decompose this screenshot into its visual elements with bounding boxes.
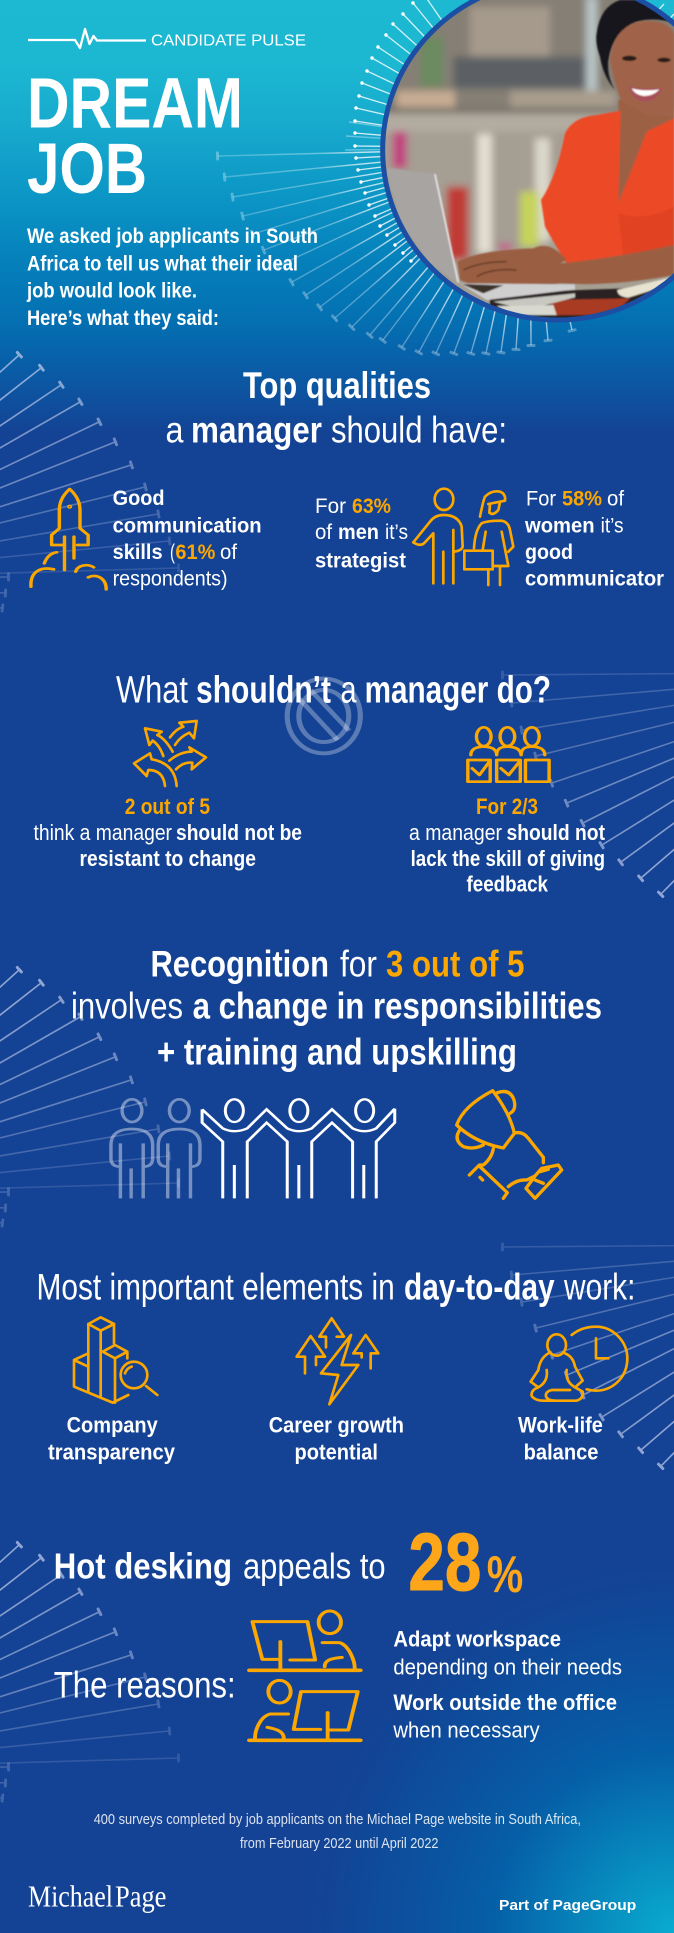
heading: top qualities: a [166,410,184,451]
heading: recognition: involves [71,985,183,1026]
text: adapt workspace and work outside: Work outside the office [393,1690,617,1715]
text: good communication: respondents) [113,567,228,591]
text: career growth [269,1413,404,1464]
text: work-life balance: balance [524,1439,598,1464]
heading: day-to-day work: Most important elements in [36,1266,395,1307]
footnote: 400 surveys completed by job applicants on the Michael Page website in South Africa, [94,1811,581,1828]
intro text: Here’s what they said: [27,307,219,330]
stat: 28%: 28 [408,1517,481,1608]
heading: day-to-day work: work: [563,1266,635,1307]
text: women good communicator: it’s [601,513,624,537]
heading: hot desking: Hot desking [54,1545,232,1586]
heading: what shouldn't a manager do: a [340,669,357,711]
heading: day-to-day work: day-to-day [404,1266,555,1307]
text: women good communicator: women [524,513,595,537]
text: adapt workspace and work outside [392,1627,622,1743]
text: adapt workspace and work outside: when necessary [392,1718,540,1743]
text: resistant to change: resistant to change [80,846,256,871]
title [27,63,243,209]
logo: Michael Page: Michael [28,1879,113,1914]
heading: recognition: a change in responsibilities [193,985,602,1026]
text: men strategist: strategist [315,549,406,573]
text: adapt workspace and work outside: depending on their needs [393,1654,622,1679]
text: women good communicator: good [525,540,573,564]
text: resistant to change: should not be [176,820,302,845]
footnote [94,1811,581,1852]
text: resistant to change: 2 out of 5 [125,794,210,819]
heading: recognition: Recognition [150,944,329,985]
text: resistant to change: think a manager [34,820,172,845]
text: men strategist [315,494,408,573]
heading: top qualities: should have: [331,410,507,451]
text: women good communicator: communicator [525,567,665,591]
icon: rocket [31,489,106,589]
icon: three people with raised arms [202,1099,395,1198]
icon: meditation and clock [531,1327,627,1401]
intro text: We asked job applicants in South [27,225,318,248]
text: women good communicator: 58% [562,487,602,511]
text: work-life balance [518,1413,603,1464]
text: men strategist: For [315,494,346,518]
label: part of PageGroup: Part of PageGroup [499,1897,636,1914]
text: adapt workspace and work outside: Adapt workspace [393,1627,561,1652]
icon: trophy [457,1091,562,1198]
sunburst around photo [218,0,674,353]
text: feedback: lack the skill of giving [411,846,605,871]
icon: prohibited sign [287,679,360,753]
icon: diverging arrows [134,721,206,786]
title: JOB [27,129,147,209]
text: career growth: Career growth [269,1413,404,1438]
text: men strategist: of [315,520,332,544]
icon: two people at desks [249,1611,360,1740]
title: DREAM [27,63,243,143]
heading: recognition: 3 out of 5 [386,944,524,985]
text: company transparency [48,1413,176,1464]
text: good communication: of [220,540,237,564]
text: men strategist: 63% [352,494,391,518]
text: good communication: skills [113,540,163,564]
text: feedback: a manager [409,820,502,845]
text: good communication: communication [113,513,262,537]
text: men strategist: men [338,520,379,544]
heading: what shouldn't a manager do: shouldn’t [196,669,331,711]
text: women good communicator [524,487,665,591]
intro text [26,225,318,330]
heading: top qualities [166,365,507,451]
photo: woman at laptop [367,0,674,340]
heading: top qualities: manager [191,410,322,451]
heading: recognition: + training and upskilling [157,1031,517,1072]
intro text: job would look like. [26,280,197,303]
icon: people with checkboxes [468,727,549,782]
heading: recognition [71,944,602,1072]
text: company transparency: Company [67,1413,158,1438]
footnote: from February 2022 until April 2022 [240,1835,438,1852]
text: work-life balance: Work-life [518,1413,603,1438]
text: good communication: ( [170,540,176,564]
label: candidate pulse: CANDIDATE PULSE [151,33,306,50]
text: career growth: potential [294,1439,378,1464]
heading: hot desking [54,1545,386,1586]
text: good communication [113,486,262,591]
text: feedback: feedback [466,872,548,897]
text: company transparency: transparency [48,1439,176,1464]
heading: what shouldn't a manager do: manager do? [365,669,551,711]
icon: pulse line [28,29,146,48]
icon: man and woman [413,489,513,585]
text: feedback: For 2/3 [476,794,538,819]
heading: top qualities: Top qualities [243,365,431,406]
text: good communication: 61% [175,540,215,564]
text: feedback: should not [506,820,605,845]
stat: 28%: % [487,1546,523,1604]
heading: recognition: for [340,944,377,985]
heading: what shouldn't a manager do: What [116,669,188,711]
text: the reasons: The reasons: [54,1664,236,1705]
heading: what shouldn't a manager do [116,669,551,711]
text: men strategist: it’s [385,520,408,544]
text: good communication: Good [113,486,165,510]
icon: buildings and magnifier [74,1317,157,1403]
heading: hot desking: appeals to [243,1545,386,1586]
icon: arrows and lightning bolt [297,1318,378,1404]
intro text: Africa to tell us what their ideal [27,253,298,276]
text: women good communicator: of [607,487,624,511]
text: women good communicator: For [526,487,556,511]
icon: two faint people [111,1099,200,1198]
text: feedback [409,794,605,897]
logo: Michael Page: Page [115,1879,166,1914]
text: resistant to change [34,794,302,871]
